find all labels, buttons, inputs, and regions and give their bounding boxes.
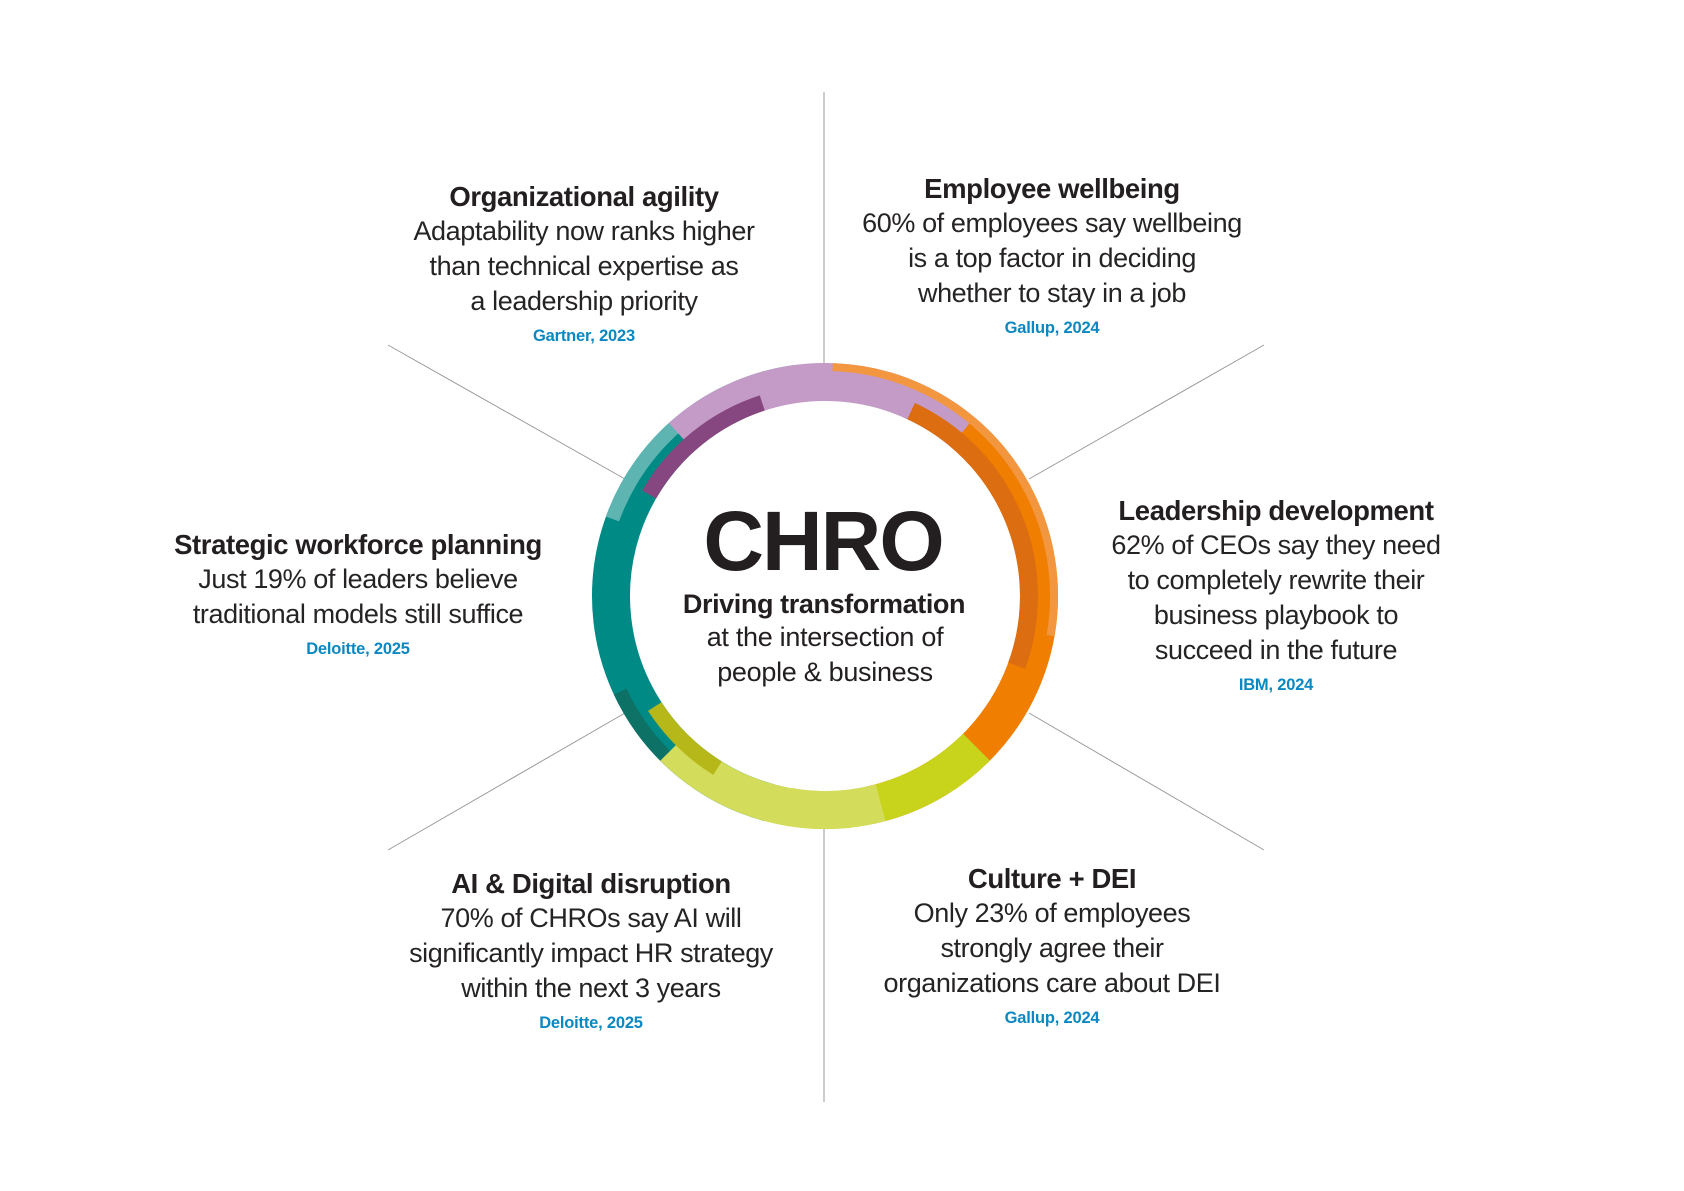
text block: Strategic workforce planning: Deloitte, 2025 xyxy=(306,640,410,658)
centre text: CHRO xyxy=(703,494,943,588)
text block: AI & Digital disruption: 70% of CHROs say AI will xyxy=(440,903,742,933)
text block: Strategic workforce planning: Just 19% of leaders believe xyxy=(198,564,518,594)
ring: CHRO colour ring xyxy=(522,293,1128,899)
text block: Culture + DEI: organizations care about DEI xyxy=(883,968,1220,998)
text block: Employee wellbeing: Gallup, 2024 xyxy=(1005,319,1099,337)
text block: Culture + DEI: Culture + DEI xyxy=(968,863,1136,894)
text block: Organizational agility: Gartner, 2023 xyxy=(533,327,635,345)
text block: Employee wellbeing: 60% of employees say wellbeing xyxy=(862,208,1242,238)
text block: Culture + DEI: Only 23% of employees xyxy=(914,898,1190,928)
text block: AI & Digital disruption: within the next 3 years xyxy=(461,973,721,1003)
text block: Leadership development xyxy=(1111,495,1441,694)
text block: Organizational agility: Adaptability now ranks higher xyxy=(413,216,755,246)
text block: Organizational agility: Organizational agility xyxy=(449,181,719,212)
text block: Leadership development: 62% of CEOs say they need xyxy=(1111,530,1441,560)
text block: Organizational agility: than technical expertise as xyxy=(430,251,738,281)
text block: Employee wellbeing xyxy=(862,173,1242,337)
text block: Culture + DEI: strongly agree their xyxy=(940,933,1164,963)
text block: Leadership development: business playbook to xyxy=(1154,600,1398,630)
text block: Leadership development: succeed in the future xyxy=(1155,635,1397,665)
text block: Employee wellbeing: whether to stay in a job xyxy=(918,278,1186,308)
text block: Organizational agility: a leadership priority xyxy=(470,286,698,316)
text block: Employee wellbeing: Employee wellbeing xyxy=(924,173,1180,204)
text block: Strategic workforce planning: traditional models still suffice xyxy=(193,599,523,629)
text block: Leadership development: Leadership development xyxy=(1118,495,1434,526)
text block: AI & Digital disruption: significantly impact HR strategy xyxy=(409,938,773,968)
text block: Strategic workforce planning xyxy=(174,529,542,658)
text block: Leadership development: to completely rewrite their xyxy=(1128,565,1424,595)
centre text: at the intersection of xyxy=(707,622,944,652)
text block: Culture + DEI xyxy=(883,863,1220,1027)
centre text xyxy=(683,494,965,687)
text block: Strategic workforce planning: Strategic workforce planning xyxy=(174,529,542,560)
text block: Leadership development: IBM, 2024 xyxy=(1239,676,1313,694)
text block: Employee wellbeing: is a top factor in deciding xyxy=(908,243,1196,273)
text block: Culture + DEI: Gallup, 2024 xyxy=(1005,1009,1099,1027)
centre text: Driving transformation xyxy=(683,589,965,619)
text block: Organizational agility xyxy=(413,181,755,345)
text block: AI & Digital disruption xyxy=(409,868,774,1032)
text block: AI & Digital disruption: AI & Digital disruption xyxy=(451,868,731,899)
text block: AI & Digital disruption: Deloitte, 2025 xyxy=(539,1014,643,1032)
centre text: people & business xyxy=(717,657,933,687)
